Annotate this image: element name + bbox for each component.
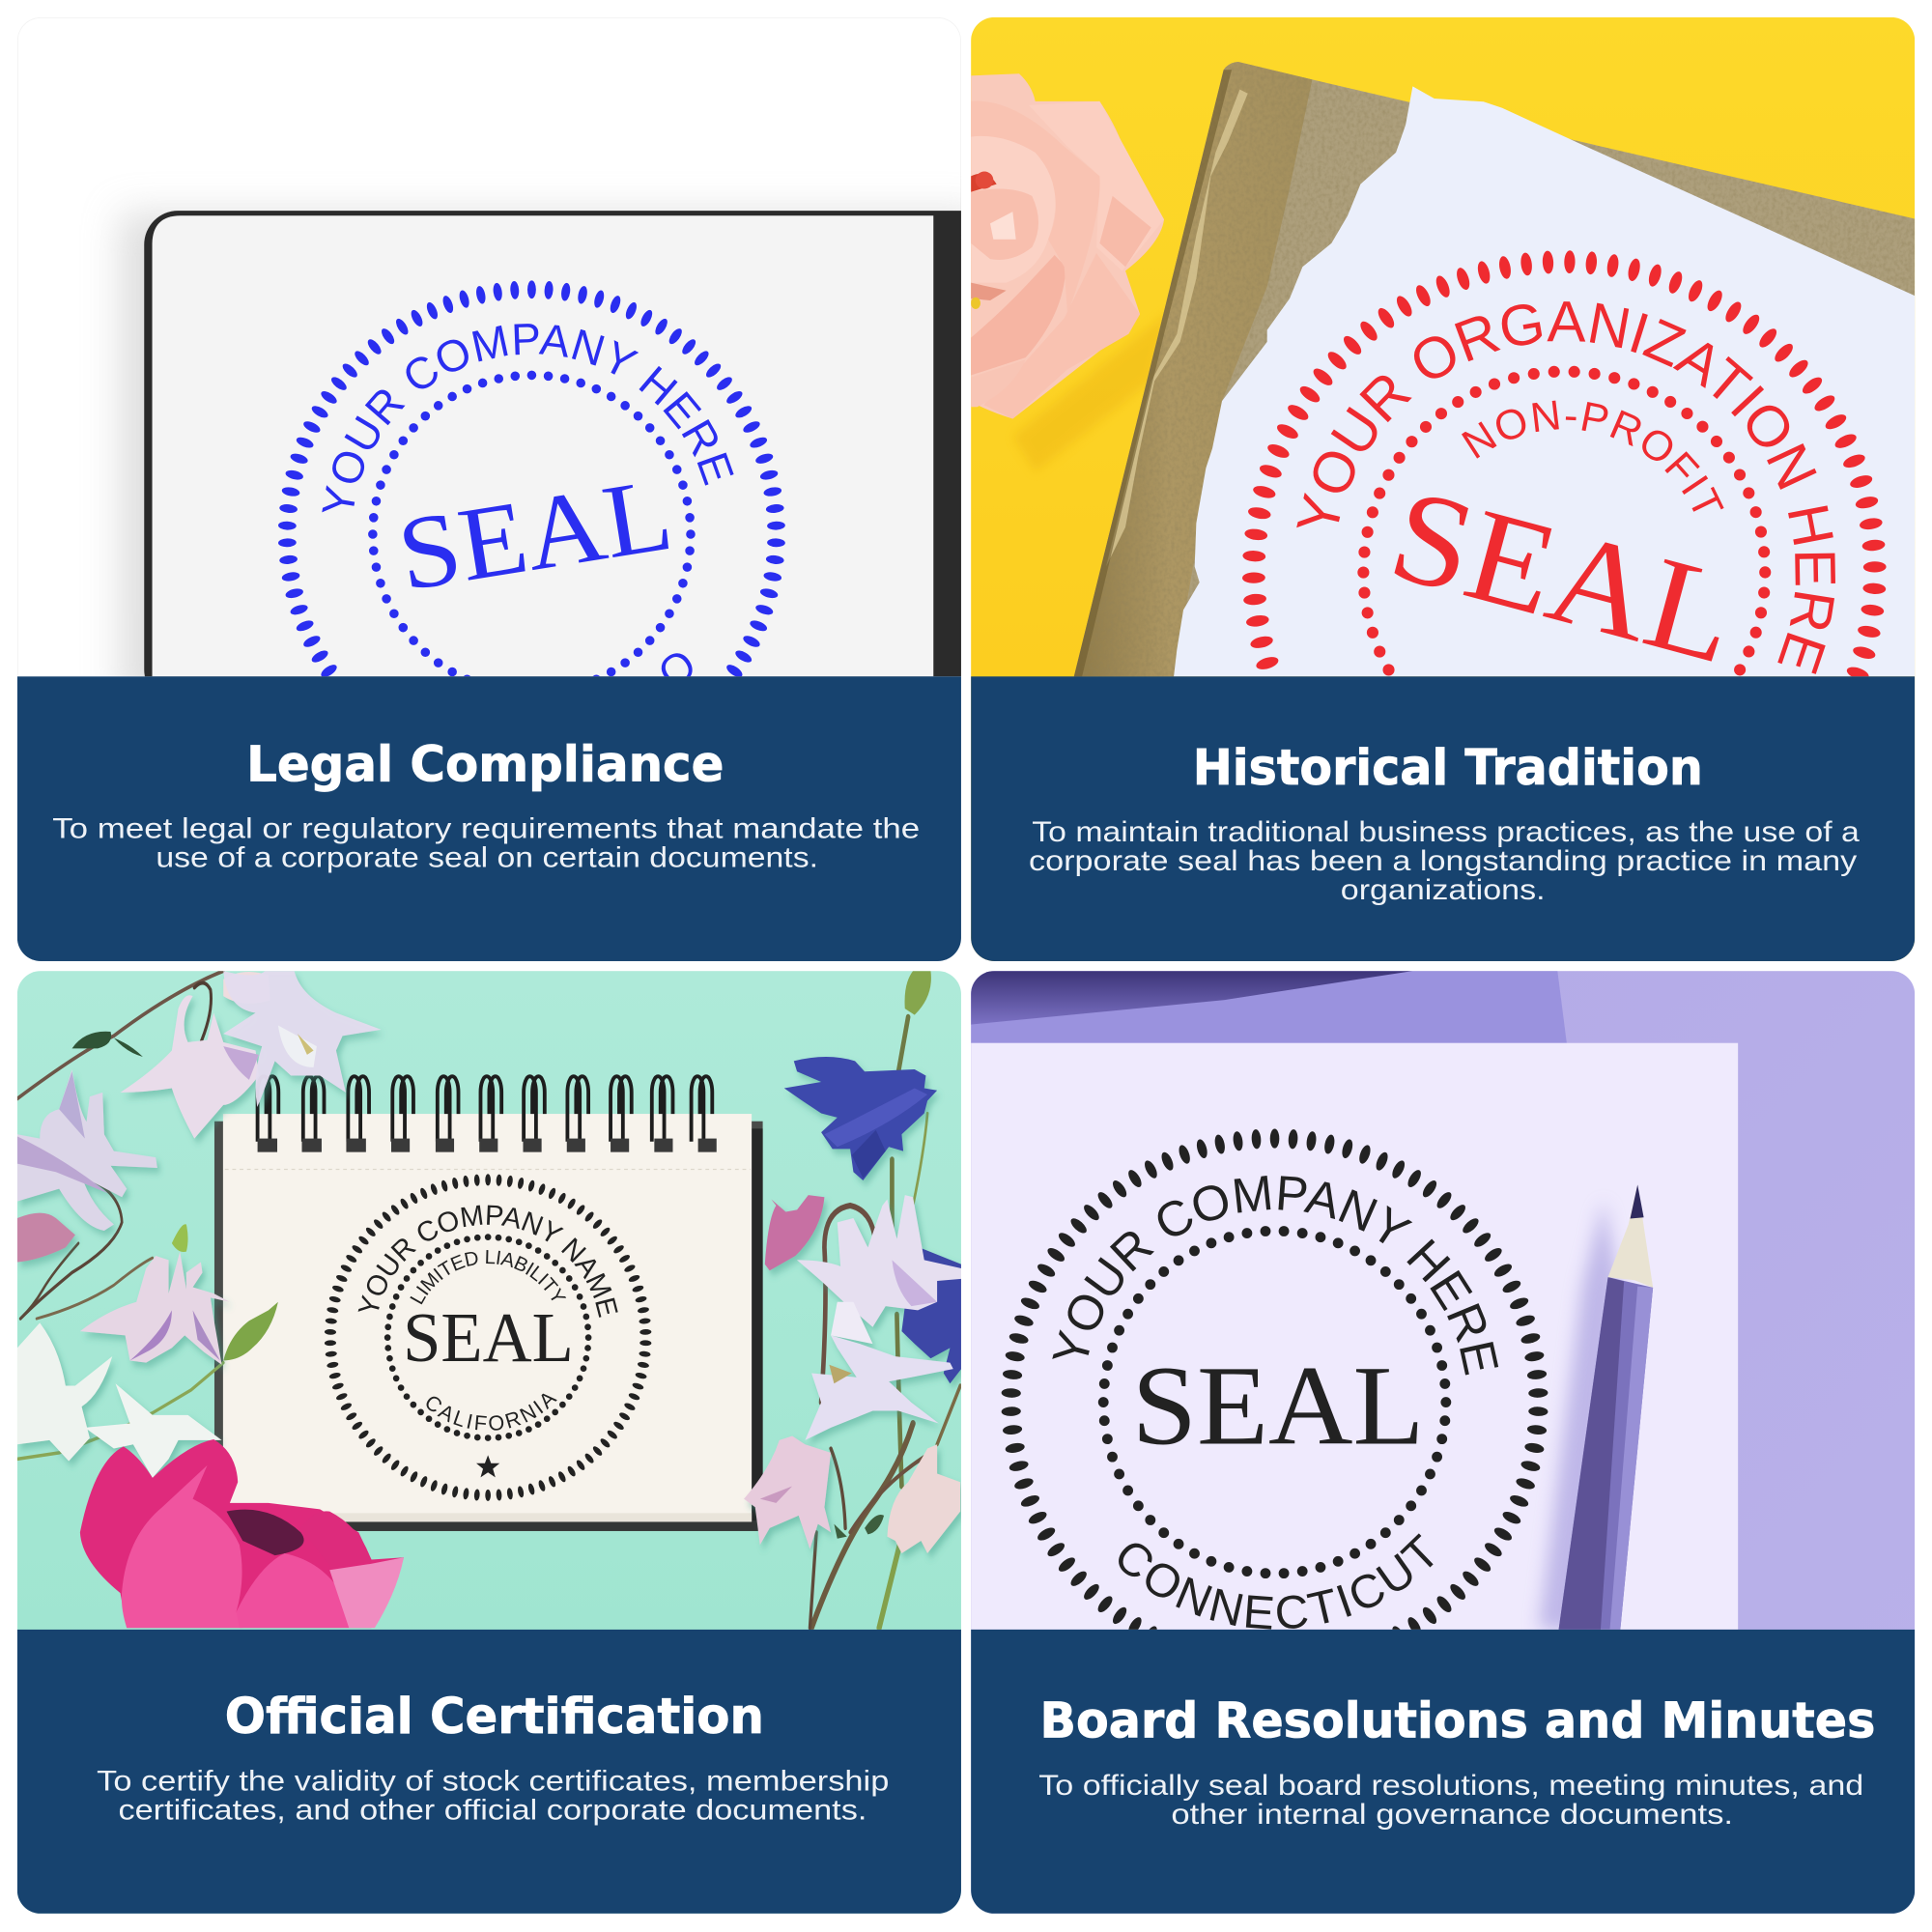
description: certificates, and other official corporate documents.	[118, 1794, 867, 1826]
flowers: left cluster	[17, 971, 404, 1628]
description: To officially seal board resolutions, meeting minutes, and	[1038, 1770, 1863, 1802]
notebook page	[153, 215, 933, 708]
description	[1029, 816, 1860, 906]
photo: blue seal on notebook	[17, 17, 961, 676]
icon: star	[476, 1455, 499, 1477]
blue seal: O	[650, 640, 705, 698]
black seal: LIMITED LIABILITY	[410, 1250, 566, 1304]
icon: pencil	[1559, 1184, 1653, 1630]
blue seal: SEAL	[390, 456, 679, 613]
black seal: SEAL	[403, 1298, 574, 1377]
caption bar	[17, 676, 961, 961]
photo: black seal and pencil	[971, 971, 1739, 1630]
flower: pink peony	[80, 1439, 404, 1628]
description	[1038, 1770, 1863, 1831]
caption bar	[971, 676, 1915, 961]
panel: official certification	[17, 971, 961, 1914]
black seal: YOUR COMPANY HERE	[1052, 1176, 1499, 1376]
black seal: CONNECTICUT	[1119, 1533, 1434, 1630]
notebook page	[223, 1114, 752, 1521]
notebook cover	[144, 211, 961, 676]
pencil shadow	[1539, 1200, 1619, 1630]
black seal	[1001, 1128, 1548, 1630]
panel: legal compliance	[17, 17, 961, 961]
red seal: SEAL	[1377, 460, 1751, 692]
torn paper	[1174, 86, 1915, 677]
black seal	[325, 1174, 651, 1501]
heading: Historical Tradition	[1193, 740, 1703, 797]
white sheet	[971, 1043, 1738, 1634]
heading: Legal Compliance	[246, 737, 724, 794]
description: use of a corporate seal on certain documents.	[156, 841, 818, 873]
notebook back cover	[214, 1122, 763, 1531]
description: organizations.	[1341, 874, 1546, 906]
blue seal	[278, 280, 785, 676]
black seal: SEAL	[1132, 1342, 1425, 1468]
heading: Official Certification	[225, 1689, 764, 1746]
caption bar	[17, 1630, 961, 1914]
black seal: YOUR COMPANY NAME	[357, 1206, 618, 1318]
blue seal: YOUR COMPANY HERE	[322, 324, 734, 512]
black seal: CALIFORNIA	[427, 1393, 557, 1431]
description: To certify the validity of stock certificates, membership	[97, 1765, 889, 1797]
icon: pink rose	[971, 73, 1164, 418]
flowers: right cluster	[744, 971, 961, 1628]
description	[97, 1765, 889, 1826]
description: To maintain traditional business practices, as the use of a	[1032, 816, 1860, 848]
book	[1074, 62, 1915, 677]
description	[52, 812, 920, 873]
description: To meet legal or regulatory requirements that mandate the	[52, 812, 920, 844]
panel: board resolutions and minutes	[971, 971, 1915, 1914]
red seal: YOUR ORGANIZATION HERE	[1296, 301, 1835, 674]
description: corporate seal has been a longstanding practice in many	[1029, 845, 1857, 877]
photo: red seal on torn paper	[971, 62, 1915, 676]
panel: historical tradition	[971, 17, 1915, 961]
heading: Board Resolutions and Minutes	[1040, 1693, 1875, 1750]
photo: notebook with flowers	[17, 971, 961, 1630]
spiral binding	[258, 1076, 717, 1152]
description: other internal governance documents.	[1171, 1799, 1733, 1831]
purple folder	[971, 971, 1567, 1043]
red seal: NON-PROFIT	[1462, 400, 1724, 512]
caption bar	[971, 1630, 1915, 1914]
